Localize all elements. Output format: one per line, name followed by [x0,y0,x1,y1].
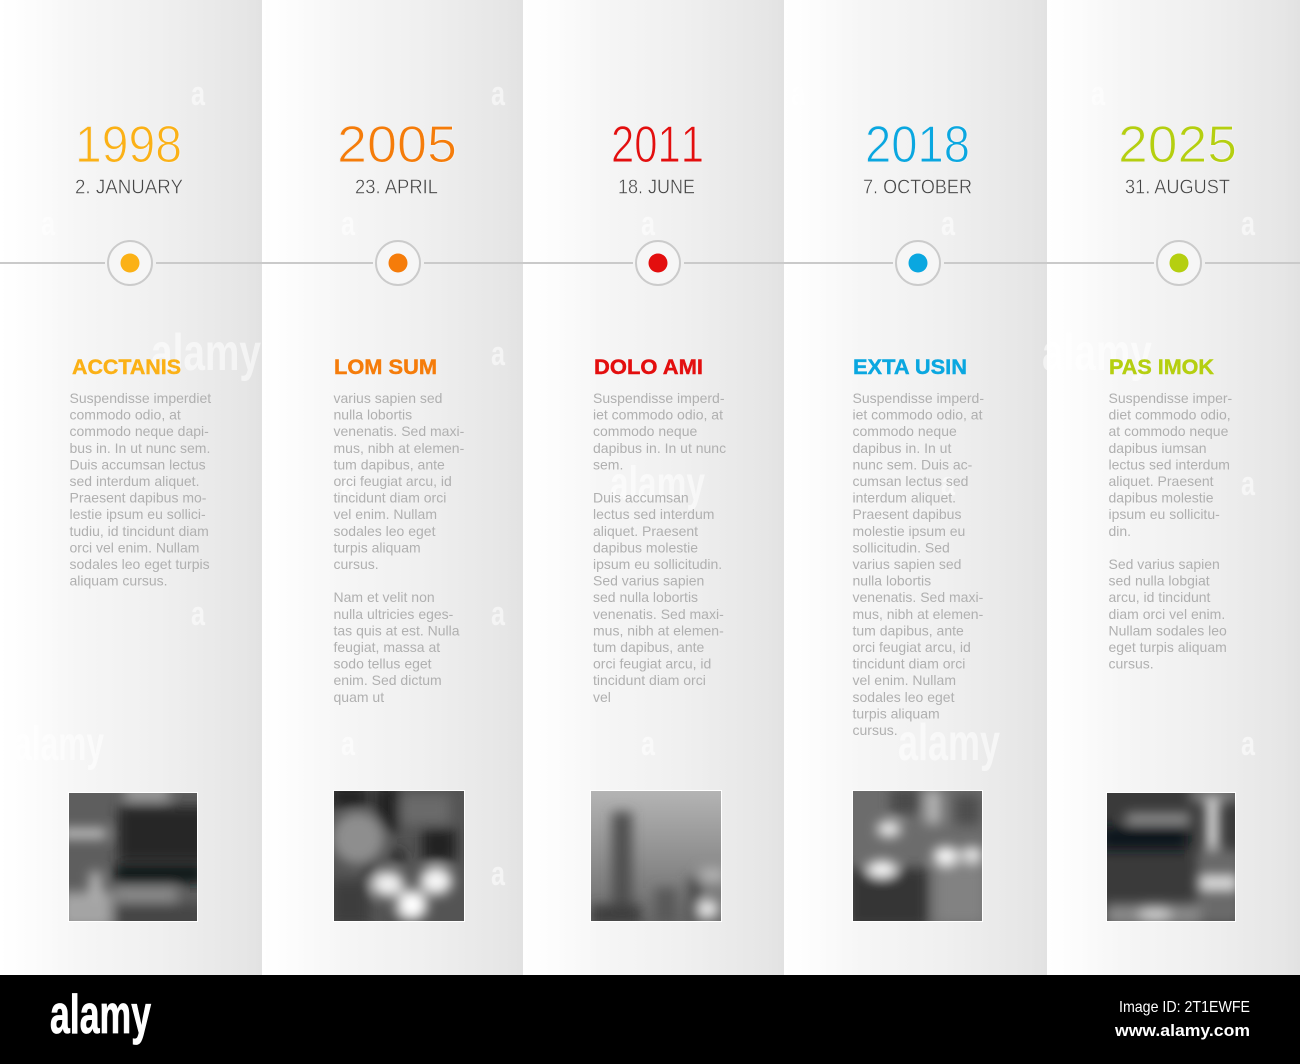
body text column 5: Suspendisse imper- [1108,390,1233,406]
column 4: 2018 [848,116,985,928]
body text column 5: arcu, id tincidunt [1108,589,1211,605]
photo 1 [69,792,198,922]
body text column 3: sed nulla lobortis [593,589,698,605]
body text column 3: vel [593,689,611,705]
timeline marker 1998 [108,241,152,285]
body text column 2: quam ut [334,689,384,705]
body text column 2: nulla lobortis [334,407,412,423]
body text column 2: orci feugiat arcu, id [334,473,452,489]
body text column 3: tum dapibus, ante [593,639,705,655]
watermark overlay: a [191,75,206,113]
body text column 5: at commodo neque [1108,423,1229,439]
body text column 3: orci feugiat arcu, id [593,656,711,672]
watermark overlay: alamy [898,714,1000,772]
body text column 3: sem. [593,456,623,472]
body text column 4: mus, nibh at elemen- [852,606,984,622]
body text column 5: Nullam sodales leo [1108,622,1227,638]
body text column 3: dapibus molestie [593,539,698,555]
body text column 3: mus, nibh at elemen- [593,622,724,638]
body text column 4: orci feugiat arcu, id [852,639,971,655]
watermark overlay: alamy [14,718,104,771]
body text column 4: venenatis. Sed maxi- [852,589,984,605]
column 2: 2005 [330,116,465,925]
watermark overlay: a [191,595,206,633]
body text column 3: Duis accumsan [593,490,689,506]
body text column 1: bus in. In ut nunc sem. [70,440,210,456]
body text column 4: iet commodo odio, at [852,407,983,423]
body text column 4: Suspendisse imperd- [852,390,984,406]
body text column 2: tum dapibus, ante [334,456,445,472]
body text column 3: Suspendisse imperd- [593,390,725,406]
website: www.alamy.com [1114,1021,1250,1040]
photo 2 [330,786,465,925]
body text column 1: Suspendisse imperdiet [70,390,211,406]
body text column 5: dapibus molestie [1108,490,1214,506]
timeline marker 2025 [1157,241,1201,285]
body text column 4: cursus. [852,722,898,738]
body text column 1: commodo neque dapi- [70,423,209,439]
column 5: 2025 [1107,126,1236,922]
body text column 2: venenatis. Sed maxi- [334,423,465,439]
body text column 5: sed nulla lobgiat [1108,573,1210,589]
year 2025: 2025 [1118,116,1237,174]
body text column 4: Praesent dapibus [852,506,961,522]
alamy logo: alamy [50,983,151,1045]
body text column 3: aliquet. Praesent [593,523,698,539]
body text column 4: cumsan lectus sed [852,473,968,489]
body text column 5: lectus sed interdum [1108,456,1230,472]
date 2. January: 2. JANUARY [75,176,183,198]
date 18. June: 18. JUNE [618,176,695,198]
watermark overlay: a [491,75,506,113]
body text column 1: lestie ipsum eu sollici- [70,506,206,522]
body text column 2: sodales leo eget [334,523,436,539]
body text column 3: venenatis. Sed maxi- [593,606,724,622]
column 3: 2011 [590,116,726,925]
body text column 4: tum dapibus, ante [852,622,964,638]
body text column 2: feugiat, massa at [334,639,440,655]
body text column 4: interdum aliquet. [852,490,956,506]
body text column 5: ipsum eu sollicitu- [1108,506,1220,522]
heading Acctanis: ACCTANIS [72,356,181,379]
heading Pas Imok: PAS IMOK [1109,356,1214,379]
watermark overlay: a [491,595,506,633]
body text column 2: Nam et velit non [334,589,435,605]
body text column 3: iet commodo odio, at [593,407,723,423]
body text column 2: tincidunt diam orci [334,490,446,506]
watermark overlay: a [1091,75,1106,113]
heading Exta Usin: EXTA USIN [853,356,967,379]
body text column 4: nulla lobortis [852,573,931,589]
body text column 4: commodo neque [852,423,957,439]
body text column 5: Sed varius sapien [1108,556,1220,572]
body text column 2: turpis aliquam [334,539,421,555]
body text column 4: dapibus in. In ut [852,440,951,456]
watermark overlay: a [41,205,56,243]
body text column 1: sodales leo eget turpis [70,556,210,572]
footer bar [0,975,1300,1064]
body text column 2: sodo tellus eget [334,656,432,672]
watermark overlay: a [341,725,356,763]
body text column 5: diet commodo odio, [1108,407,1231,423]
photo 3 [590,790,724,925]
photo 5 [1107,792,1236,922]
watermark overlay: a [1241,465,1256,503]
body text column 1: aliquam cursus. [70,573,168,589]
watermark overlay: a [491,855,506,893]
watermark overlay: a [1241,725,1256,763]
year 1998: 1998 [75,116,182,174]
body text column 4: varius sapien sed [852,556,961,572]
watermark overlay [14,75,1256,893]
body text column 1: orci vel enim. Nullam [70,539,199,555]
body text column 2: mus, nibh at elemen- [334,440,465,456]
timeline marker 2018 [896,241,940,285]
watermark overlay: a [641,205,656,243]
body text column 2: enim. Sed dictum [334,672,442,688]
watermark overlay: alamy [1042,324,1152,382]
watermark overlay: alamy [610,458,705,511]
body text column 3: lectus sed interdum [593,506,714,522]
body text column 4: sollicitudin. Sed [852,539,950,555]
date 7. October: 7. OCTOBER [863,176,972,198]
body text column 1: commodo odio, at [70,407,181,423]
body text column 3: dapibus in. In ut nunc [593,440,726,456]
body text column 2: varius sapien sed [334,390,442,406]
body text column 2: vel enim. Nullam [334,506,437,522]
watermark overlay: a [341,465,356,503]
body text column 1: sed interdum aliquet. [70,473,199,489]
body text column 4: vel enim. Nullam [852,672,956,688]
watermark overlay: a [941,465,956,503]
image ID: Image ID: 2T1EWFE [1119,999,1250,1016]
date 31. August: 31. AUGUST [1125,176,1230,198]
body text column 5: dapibus iumsan [1108,440,1207,456]
watermark overlay: a [791,75,806,113]
body text column 5: diam orci vel enim. [1108,606,1225,622]
watermark overlay: a [491,335,506,373]
year 2005: 2005 [337,116,457,174]
watermark overlay: a [341,205,356,243]
body text column 3: Sed varius sapien [593,573,704,589]
body text column 5: cursus. [1108,656,1154,672]
watermark overlay: a [941,205,956,243]
body text column 4: tincidunt diam orci [852,656,965,672]
body text column 3: commodo neque [593,423,698,439]
body text column 1: tudiu, id tincidunt diam [70,523,209,539]
body text column 3: ipsum eu sollicitudin. [593,556,722,572]
body text column 5: aliquet. Praesent [1108,473,1214,489]
body text column 3: tincidunt diam orci [593,672,706,688]
body text column 5: din. [1108,523,1131,539]
body text column 2: tas quis at est. Nulla [334,622,460,638]
timeline marker 2005 [376,241,420,285]
body text column 1: Praesent dapibus mo- [70,490,207,506]
body text column 4: molestie ipsum eu [852,523,965,539]
year 2018: 2018 [865,116,970,174]
body text column 4: turpis aliquam [852,705,940,721]
body text column 1: Duis accumsan lectus [70,456,206,472]
timeline line [0,262,1300,264]
body text column 2: nulla ultricies eges- [334,606,454,622]
body text column 4: nunc sem. Duis ac- [852,456,973,472]
watermark overlay: alamy [151,324,261,382]
year 2011: 2011 [611,116,704,174]
column 1: 1998 [60,116,211,929]
body text column 2: cursus. [334,556,379,572]
body text column 5: eget turpis aliquam [1108,639,1227,655]
watermark overlay: a [1241,205,1256,243]
date 23. April: 23. APRIL [355,176,438,198]
watermark overlay: a [641,725,656,763]
heading Dolo Ami: DOLO AMI [594,356,703,379]
photo 4 [853,790,983,922]
body text column 4: sodales leo eget [852,689,955,705]
heading Lom Sum: LOM SUM [334,356,437,379]
timeline marker 2011 [636,241,680,285]
